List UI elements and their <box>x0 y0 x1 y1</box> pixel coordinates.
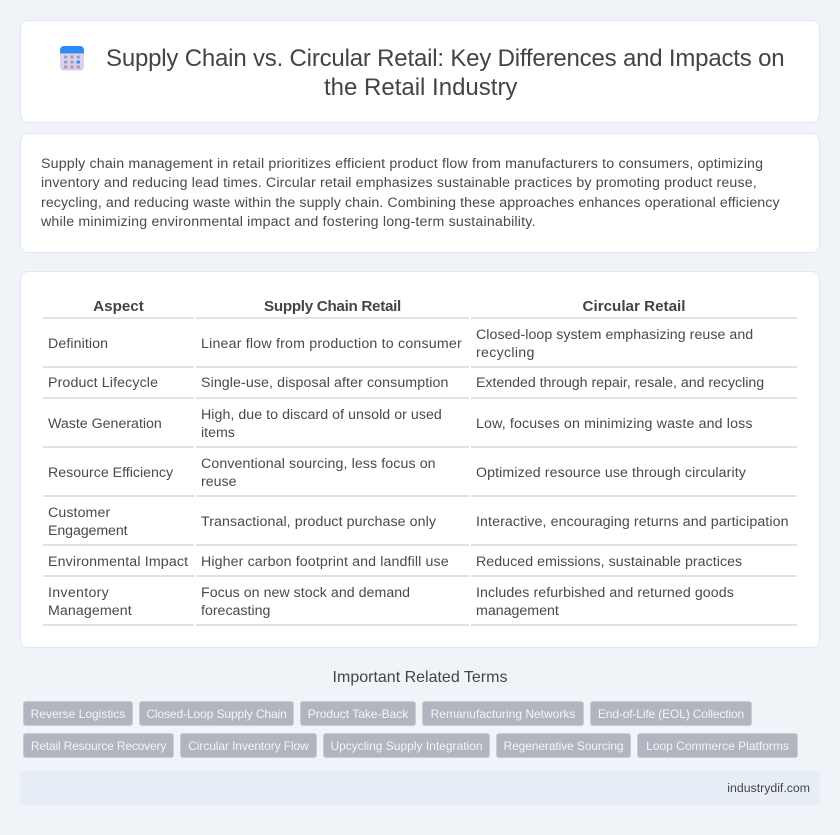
row: Inventory Management: Includes refurbished and returned goods <box>476 585 734 601</box>
intro text: while minimizing environmental impact and fostering long-term sustainability. <box>41 214 536 230</box>
related terms tags: End-of-Life (EOL) Collection <box>598 706 744 720</box>
row: Inventory Management: Focus on new stock and demand <box>201 585 410 601</box>
footer: industrydif.com <box>727 781 810 795</box>
row: Customer Engagement: Engagement <box>48 523 127 539</box>
title: Supply Chain vs. Circular Retail: Key Differences and Impacts on <box>106 45 784 72</box>
intro text: Supply chain management in retail prioritizes efficient product flow from manufacturers to consumers, optimizing <box>41 156 763 172</box>
related terms tags: Regenerative Sourcing <box>504 738 623 752</box>
intro text <box>41 156 780 230</box>
row: Resource Efficiency <box>43 456 797 497</box>
related terms tags: Remanufacturing Networks <box>431 706 575 720</box>
row: Customer Engagement: Interactive, encouraging returns and participation <box>476 514 789 530</box>
intro card <box>20 133 820 253</box>
row: Waste Generation: High, due to discard of unsold or used <box>201 407 442 423</box>
related terms tags: Closed-Loop Supply Chain <box>146 706 287 720</box>
row: Inventory Management <box>43 585 797 626</box>
row: Environmental Impact: Environmental Impact <box>48 554 188 570</box>
row: Environmental Impact <box>43 554 797 577</box>
row: Environmental Impact: Reduced emissions, sustainable practices <box>476 554 742 570</box>
table header: Circular Retail <box>582 298 685 315</box>
row: Waste Generation <box>43 407 797 448</box>
row: Customer Engagement: Transactional, product purchase only <box>201 514 436 530</box>
row: Resource Efficiency: Conventional sourcing, less focus on <box>201 456 436 472</box>
row: Definition <box>43 327 797 368</box>
row: Product Lifecycle <box>43 375 797 399</box>
intro text: inventory and reducing lead times. Circular retail emphasizes sustainable practices by promoting product reuse, <box>41 175 757 191</box>
icon: calendar <box>60 46 84 70</box>
header card <box>20 20 820 123</box>
row: Waste Generation: Waste Generation <box>48 416 162 432</box>
related terms tags: Circular Inventory Flow <box>188 738 309 752</box>
table header: Aspect <box>93 298 144 315</box>
related terms tags: Retail Resource Recovery <box>31 738 166 752</box>
table card <box>20 271 820 648</box>
row: Product Lifecycle: Extended through repair, resale, and recycling <box>476 375 764 391</box>
row: Resource Efficiency: Optimized resource use through circularity <box>476 465 746 481</box>
row: Inventory Management: Management <box>48 603 132 619</box>
related terms tags: Loop Commerce Platforms <box>646 738 789 752</box>
title <box>106 45 784 101</box>
footer <box>20 771 820 805</box>
row: Inventory Management: Inventory <box>48 585 109 601</box>
row: Product Lifecycle: Product Lifecycle <box>48 375 158 391</box>
related terms tags <box>23 701 798 758</box>
row: Definition: recycling <box>476 345 535 361</box>
related terms tags: Reverse Logistics <box>31 706 125 720</box>
row: Inventory Management: forecasting <box>201 603 270 619</box>
row: Inventory Management: management <box>476 603 559 619</box>
related terms tags: Product Take-Back <box>308 706 408 720</box>
title: the Retail Industry <box>324 74 517 101</box>
row: Product Lifecycle: Single-use, disposal after consumption <box>201 375 448 391</box>
row: Definition: Definition <box>48 336 108 352</box>
table header <box>43 298 797 319</box>
row: Customer Engagement: Customer <box>48 505 110 521</box>
related terms tags: Upcycling Supply Integration <box>330 738 483 752</box>
row: Definition: Linear flow from production to consumer <box>201 336 462 352</box>
row: Definition: Closed-loop system emphasizing reuse and <box>476 327 753 343</box>
row: Resource Efficiency: reuse <box>201 474 236 490</box>
row: Customer Engagement <box>43 505 797 546</box>
comparison table <box>43 298 797 626</box>
row: Resource Efficiency: Resource Efficiency <box>48 465 173 481</box>
table header: Supply Chain Retail <box>264 298 401 315</box>
intro text: recycling, and reducing waste within the supply chain. Combining these approaches enhances operational efficiency <box>41 195 780 211</box>
row: Waste Generation: items <box>201 425 235 441</box>
related terms heading: Important Related Terms <box>333 669 507 686</box>
row: Waste Generation: Low, focuses on minimizing waste and loss <box>476 416 753 432</box>
row: Environmental Impact: Higher carbon footprint and landfill use <box>201 554 449 570</box>
